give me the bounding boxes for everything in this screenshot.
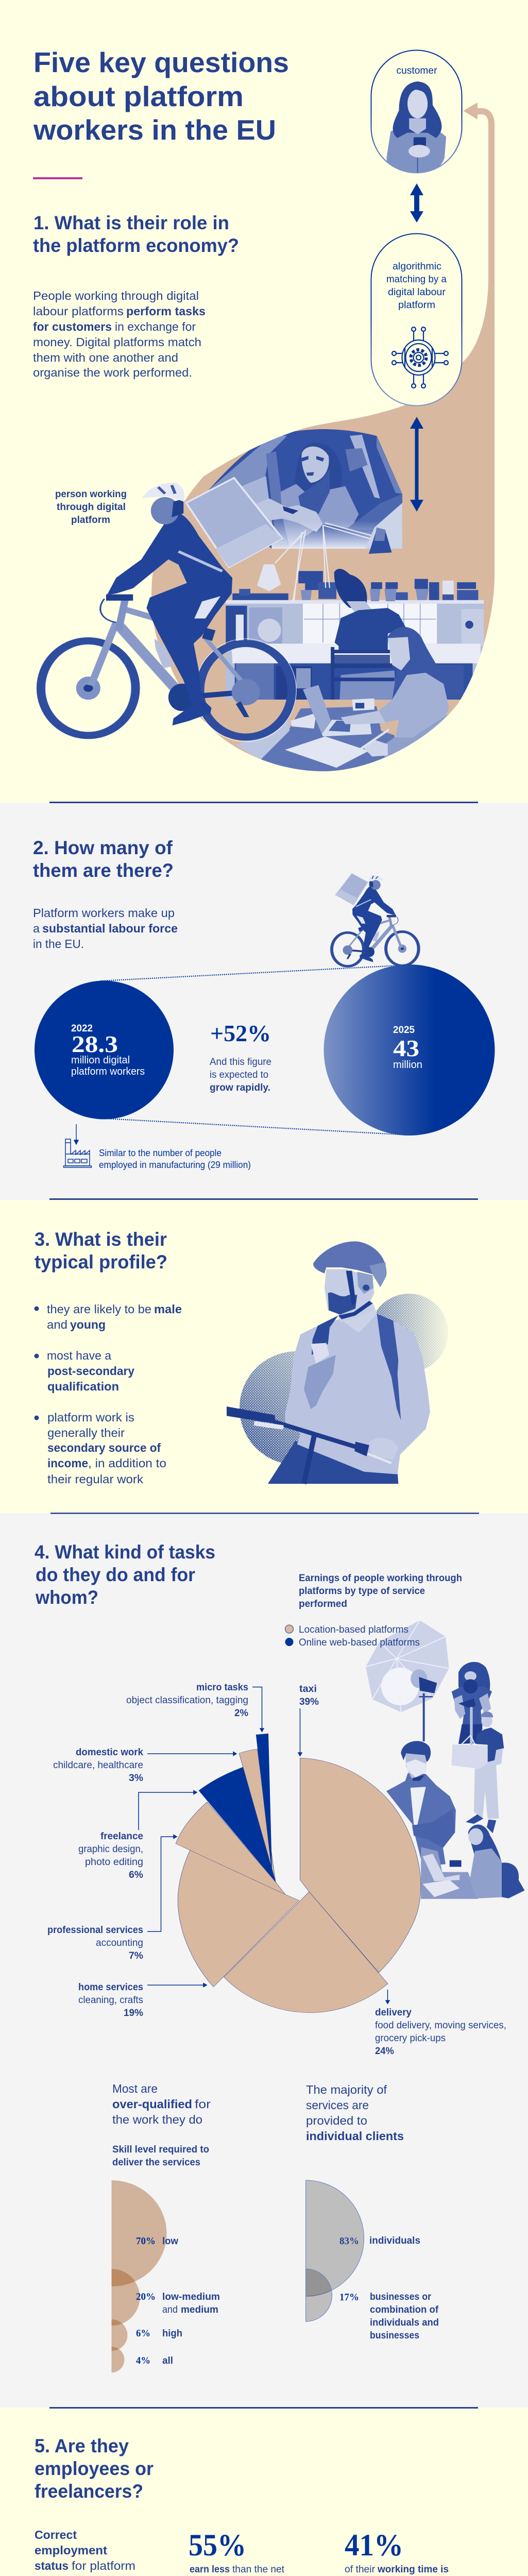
text block: labour force: Platform workers make up [33, 906, 175, 920]
stat: 41 percent unpaid: 41% [345, 2528, 403, 2562]
stat: growth 52 percent: +52% [210, 1020, 271, 1046]
stat: 41 percent unpaid: of their [345, 2564, 376, 2575]
stat: growth 52 percent: grow rapidly. [210, 1082, 270, 1093]
legend: platform types: Online web-based platforms [299, 1637, 420, 1648]
dotted connector lines [100, 965, 409, 1135]
text block: explanation of platform work [33, 289, 206, 379]
circle: 2022 value: 28.3 [72, 1031, 118, 1057]
slice: professional services 7% [176, 1802, 285, 1894]
leader lines for pie labels [139, 1687, 389, 2004]
arrow: down to factory [74, 1124, 78, 1144]
circle: 2025 value [323, 964, 495, 1136]
flow shape: tan teardrop with arrowhead [151, 103, 495, 771]
circle: 2025 value: 2025 [393, 1025, 415, 1036]
heading: question 5: 5. Are they [35, 2435, 129, 2456]
chart title: skill level: Skill level required to [112, 2144, 209, 2155]
chart: client type semicircles: 17% [339, 2292, 359, 2303]
text block: explanation of platform work: money. Digital platforms match [33, 335, 201, 349]
label: taxi: 39% [299, 1697, 319, 1707]
text block: explanation of platform work: People working through digital [33, 289, 199, 302]
heading: question 4: do they do and for [36, 1564, 195, 1585]
text block: explanation of platform work: them with one another and [33, 351, 178, 364]
heading: question 1: the platform economy? [33, 235, 239, 256]
title [33, 46, 289, 146]
stat: growth 52 percent [210, 1020, 271, 1093]
list: profile bullets: platform work is [47, 1411, 134, 1424]
chart: client type semicircles: individuals and [370, 2317, 439, 2328]
slice: freelance 6% [199, 1767, 276, 1883]
pill: customer [371, 50, 462, 175]
list: profile bullets: income [47, 1456, 88, 1470]
label: freelance: graphic design, [78, 1844, 143, 1855]
chart: skill level semicircles: 70% [136, 2235, 156, 2247]
text block: individual clients: services are [306, 2098, 369, 2112]
label: delivery: grocery pick-ups [375, 2033, 446, 2044]
panel: section 5 employees or freelancers [0, 2407, 528, 2576]
circle: 2025 value: million [393, 1059, 422, 1071]
heading: question 2: 2. How many of [33, 837, 173, 858]
list: profile bullets [34, 1302, 182, 1486]
text block: correct employment status: status [35, 2559, 69, 2572]
chart: client type semicircles [306, 2180, 439, 2341]
chart: skill level semicircles: 6% [136, 2328, 150, 2339]
label: person working through digital platform: through digital [57, 502, 126, 513]
photo: photo umbrella and lamp [366, 1620, 449, 1741]
text block: manufacturing comparison [99, 1148, 251, 1170]
list: profile bullets: and [47, 1318, 67, 1331]
label: domestic work: domestic work [76, 1747, 143, 1758]
pill: algorithmic matching: algorithmic [393, 261, 441, 272]
list: profile bullets: generally their [47, 1426, 125, 1439]
heading: question 4 [35, 1541, 215, 1608]
pill: algorithmic matching: digital labour [388, 286, 446, 298]
desk lamps [257, 523, 392, 601]
heading: question 2: them are there? [33, 860, 174, 881]
photo collage: platform workers [366, 1620, 504, 1865]
heading: question 4: 4. What kind of tasks [35, 1541, 215, 1563]
panel: section 4 tasks and clients [0, 1513, 528, 2408]
panel: section 1 role in the platform economy [0, 0, 528, 803]
list: profile bullets: post-secondary [47, 1364, 134, 1378]
chart: skill level semicircles: 4% [136, 2355, 150, 2366]
icon: factory [64, 1139, 92, 1167]
text block: labour force: a [33, 922, 40, 935]
label: person working through digital platform: platform [71, 515, 110, 526]
legend: platform types [285, 1624, 420, 1648]
list: profile bullets: young [70, 1318, 106, 1331]
text block: correct employment status [34, 2528, 141, 2576]
text block: explanation of platform work: perform tasks [126, 304, 206, 318]
text block: over-qualified: for [195, 2097, 211, 2111]
text block: explanation of platform work: in exchange for [115, 320, 196, 333]
chart title: earnings by service type: platforms by type of service [299, 1586, 425, 1597]
text block: individual clients [306, 2083, 404, 2143]
heading: question 5: freelancers? [35, 2481, 143, 2502]
chart: client type semicircles: 83% [339, 2235, 359, 2247]
label: domestic work [53, 1747, 143, 1784]
chart: exploded pie of earnings [176, 1734, 421, 2013]
slice: domestic work 3% [239, 1749, 276, 1882]
stat: 55 percent earn less [189, 2528, 296, 2576]
list: profile bullets: qualification [47, 1380, 119, 1393]
list: profile bullets: , in addition to [88, 1456, 166, 1470]
chart title: earnings by service type [299, 1573, 462, 1609]
photo: desk with shelf and worker [226, 569, 484, 700]
circle: 2022 value: 2022 [71, 1023, 93, 1034]
label: professional services [47, 1925, 143, 1961]
chart: skill level semicircles: medium [181, 2304, 218, 2315]
chart: client type semicircles: businesses [370, 2330, 419, 2341]
label: micro tasks: 2% [234, 1708, 248, 1719]
text block: explanation of platform work: organise the work performed. [33, 366, 192, 379]
icon: circuit gear [392, 327, 448, 388]
text block: manufacturing comparison: employed in manufacturing (29 million) [99, 1160, 251, 1170]
title: workers in the EU [33, 114, 276, 146]
heading: question 4: whom? [35, 1587, 98, 1608]
list: profile bullets: they are likely to be [47, 1302, 151, 1316]
text block: explanation of platform work: for customers [33, 320, 112, 333]
chart: client type semicircles: businesses or [370, 2292, 432, 2302]
pill: algorithmic matching: matching by a [386, 274, 447, 285]
list: profile bullets: most have a [47, 1349, 111, 1362]
list: profile bullets: their regular work [47, 1472, 144, 1486]
label: micro tasks: micro tasks [196, 1682, 248, 1693]
chart title: skill level: deliver the services [112, 2157, 200, 2168]
chart title: earnings by service type: Earnings of people working through [299, 1573, 462, 1584]
heading: question 1: 1. What is their role in [33, 212, 229, 233]
photo: woman with phone [386, 81, 446, 175]
stat: 41 percent unpaid: working time is [377, 2564, 449, 2575]
label: freelance: 6% [129, 1870, 143, 1880]
label: delivery: food delivery, moving services, [375, 2020, 506, 2031]
photo: woman at laptop with camera box [421, 1825, 524, 1899]
heading: question 3: 3. What is their [35, 1229, 167, 1250]
photo: delivery man with box [452, 1711, 504, 1833]
label: home services: home services [78, 1982, 143, 1993]
circle: 2022 value: platform workers [71, 1066, 145, 1077]
photo: courier with mask [386, 1741, 456, 1865]
photo: photographer [452, 1662, 492, 1745]
label: freelance: photo editing [85, 1857, 143, 1868]
heading: question 2 [33, 837, 174, 881]
text block: labour force: in the EU. [33, 937, 84, 951]
stat: growth 52 percent: And this figure [210, 1057, 271, 1067]
text block: correct employment status: employment [35, 2544, 107, 2557]
text block: correct employment status: for platform [72, 2559, 135, 2572]
text block: labour force [33, 906, 178, 951]
text block: correct employment status: Correct [35, 2528, 77, 2541]
label: domestic work: 3% [129, 1773, 143, 1784]
title: Five key questions [33, 46, 289, 78]
slice: taxi 39% [300, 1758, 421, 1973]
label: taxi [299, 1684, 319, 1707]
label: home services: 19% [124, 2008, 143, 2019]
heading: question 3 [35, 1229, 167, 1273]
chart: skill level semicircles: 20% [136, 2291, 156, 2302]
circle: 2025 value: 43 [393, 1035, 419, 1061]
text block: labour force: substantial labour force [42, 922, 178, 935]
stat: 41 percent unpaid [345, 2528, 457, 2576]
slice: home services 19% [178, 1850, 299, 1987]
text block: individual clients: individual clients [306, 2129, 404, 2143]
stippled circles behind man [240, 1294, 448, 1465]
pill: algorithmic matching [371, 234, 462, 406]
label: professional services: 7% [129, 1951, 143, 1961]
list: profile bullets: secondary source of [47, 1441, 161, 1454]
photo collage: driver and office workers [209, 429, 484, 773]
chart title: skill level [112, 2144, 209, 2168]
label: freelance [78, 1831, 143, 1880]
chart: client type semicircles: combination of [370, 2304, 439, 2315]
chart: client type semicircles: individuals [369, 2235, 420, 2246]
heading: question 5: employees or [35, 2458, 154, 2479]
text block: individual clients: provided to [306, 2114, 367, 2127]
label: professional services: professional services [47, 1925, 143, 1936]
arrow: platform to worker [410, 417, 423, 512]
chart: skill level semicircles: and [162, 2304, 178, 2315]
photo: courier cyclist [41, 478, 296, 742]
stat: 55 percent earn less: than the net [232, 2564, 285, 2575]
list: profile bullets: male [154, 1302, 182, 1316]
text block: individual clients: The majority of [306, 2083, 387, 2096]
photo: woman at laptop [236, 627, 459, 773]
arrow: customer to platform [410, 183, 423, 223]
text block: over-qualified: Most are [112, 2082, 158, 2095]
text block: over-qualified [112, 2082, 211, 2126]
heading: question 3: typical profile? [35, 1251, 167, 1273]
chart title: earnings by service type: performed [299, 1599, 347, 1609]
pill: customer: customer [397, 65, 437, 76]
label: taxi: taxi [299, 1684, 317, 1694]
chart: skill level semicircles: low-medium [162, 2292, 220, 2302]
stat: 55 percent earn less: earn less [190, 2564, 230, 2575]
chart: skill level semicircles: low [162, 2236, 178, 2247]
label: delivery [375, 2007, 506, 2057]
legend: platform types: Location-based platforms [299, 1624, 408, 1635]
label: person working through digital platform: person working [55, 489, 127, 500]
panel: section 3 typical profile [0, 1198, 528, 1513]
chart: skill level semicircles: high [162, 2328, 182, 2339]
circle: 2022 value [35, 981, 174, 1119]
label: delivery: 24% [375, 2046, 394, 2057]
heading: question 1 [33, 212, 239, 256]
label: home services: cleaning, crafts [78, 1995, 143, 2006]
heading: question 5 [35, 2435, 154, 2502]
label: person working through digital platform [55, 489, 127, 526]
label: micro tasks [126, 1682, 248, 1719]
stat: 55 percent earn less: 55% [189, 2528, 246, 2562]
label: professional services: accounting [96, 1938, 143, 1948]
label: home services [78, 1982, 143, 2019]
label: micro tasks: object classification, tagging [126, 1695, 248, 1706]
slice: micro tasks 2% [256, 1734, 272, 1875]
text block: explanation of platform work: labour platforms [33, 304, 124, 318]
text block: manufacturing comparison: Similar to the number of people [99, 1148, 222, 1158]
icon: small cyclist on circle [330, 873, 419, 968]
label: freelance: freelance [100, 1831, 143, 1842]
pill: algorithmic matching: platform [398, 299, 435, 311]
slice: delivery 24% [224, 1892, 388, 2013]
label: delivery: delivery [375, 2007, 412, 2018]
panel: section 2 how many [0, 802, 528, 1200]
text block: over-qualified: over-qualified [112, 2097, 192, 2111]
photo: man with helmet and bicycle [227, 1242, 430, 1484]
text block: over-qualified: the work they do [112, 2113, 202, 2126]
label: domestic work: childcare, healthcare [53, 1760, 143, 1771]
circle: 2022 value: million digital [71, 1055, 130, 1066]
chart: skill level semicircles: all [162, 2355, 173, 2366]
stat: growth 52 percent: is expected to [210, 1070, 268, 1080]
title: about platform [33, 80, 244, 112]
chart: skill level semicircles [111, 2180, 220, 2372]
photo: driver in car [209, 429, 402, 549]
